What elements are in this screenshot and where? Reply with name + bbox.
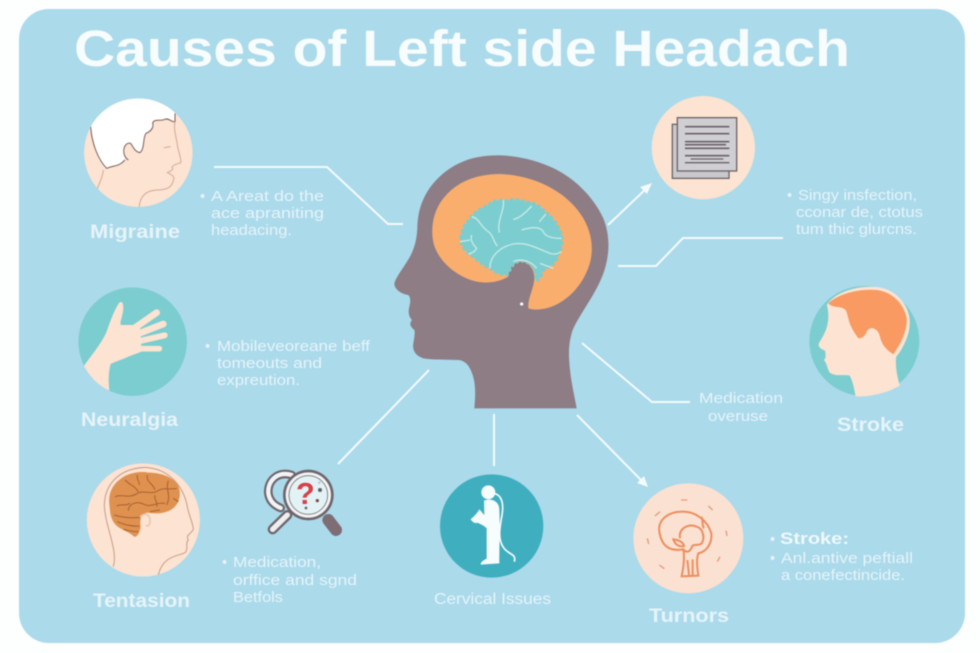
icon: head with brain <box>87 463 200 577</box>
icon: hand <box>78 287 187 396</box>
description <box>787 188 923 238</box>
label: Migraine <box>90 222 180 243</box>
connector lines and arrows <box>214 167 783 487</box>
item: document <box>652 96 923 238</box>
label: Turnors <box>649 606 729 627</box>
description: Singy insfection, <box>798 188 917 204</box>
item: stroke <box>809 286 919 436</box>
description: expreution. <box>217 373 300 389</box>
central head illustration <box>394 155 608 408</box>
description: a conefectincide. <box>781 568 905 584</box>
item: neuralgia <box>78 287 371 431</box>
description: headacing. <box>211 223 292 239</box>
description: tomeouts and <box>217 356 322 372</box>
head silhouette <box>394 155 608 408</box>
description: Anl.antive peftiall <box>781 551 913 567</box>
description: ace apraniting <box>211 206 324 222</box>
item: medication overuse: Medication <box>699 391 783 407</box>
item: stroke list <box>770 529 913 584</box>
description: orffice and sgnd <box>233 573 357 589</box>
icon: profile with orange hair <box>809 286 919 396</box>
description <box>781 551 913 584</box>
orange brain surround <box>432 174 592 310</box>
label: Stroke <box>837 415 904 436</box>
ear mark <box>520 302 523 306</box>
icon: tumor outline <box>633 483 743 593</box>
description <box>205 339 371 389</box>
description: • <box>222 555 227 571</box>
description: tum thic glurcns. <box>796 222 917 238</box>
item: stroke list: • <box>770 532 775 548</box>
icon: stacked papers <box>652 96 755 199</box>
item: stroke list: • <box>770 551 775 567</box>
heading: Stroke: <box>780 529 849 548</box>
title: Causes of Left side Headach <box>74 20 850 77</box>
icon: standing figure <box>440 474 543 578</box>
description: Mobileveoreane beff <box>217 339 371 355</box>
description: • <box>205 339 210 355</box>
description: Medication, <box>233 555 321 571</box>
description: • <box>200 189 205 205</box>
description <box>200 189 324 239</box>
description: A Areat do the <box>211 189 324 205</box>
item: cervical issues <box>434 474 551 608</box>
item: migraine <box>84 98 324 243</box>
description: • <box>787 188 792 204</box>
label: Neuralgia <box>81 410 178 431</box>
brain folds <box>460 200 562 268</box>
item: tentasion <box>87 463 200 612</box>
item: medication overuse: overuse <box>708 409 768 425</box>
label: Tentasion <box>93 591 190 612</box>
label: Cervical Issues <box>434 591 551 608</box>
description: Betfols <box>233 590 283 606</box>
description <box>222 555 357 606</box>
description: cconar de, ctotus <box>796 205 923 221</box>
icon: profile with white hair <box>84 98 193 208</box>
teal brain <box>461 200 562 281</box>
item: medication overuse <box>699 391 783 425</box>
icon: magnifying glass with question mark: ? <box>296 477 315 511</box>
item: turnors <box>633 483 743 627</box>
item: magnifier <box>222 470 357 606</box>
